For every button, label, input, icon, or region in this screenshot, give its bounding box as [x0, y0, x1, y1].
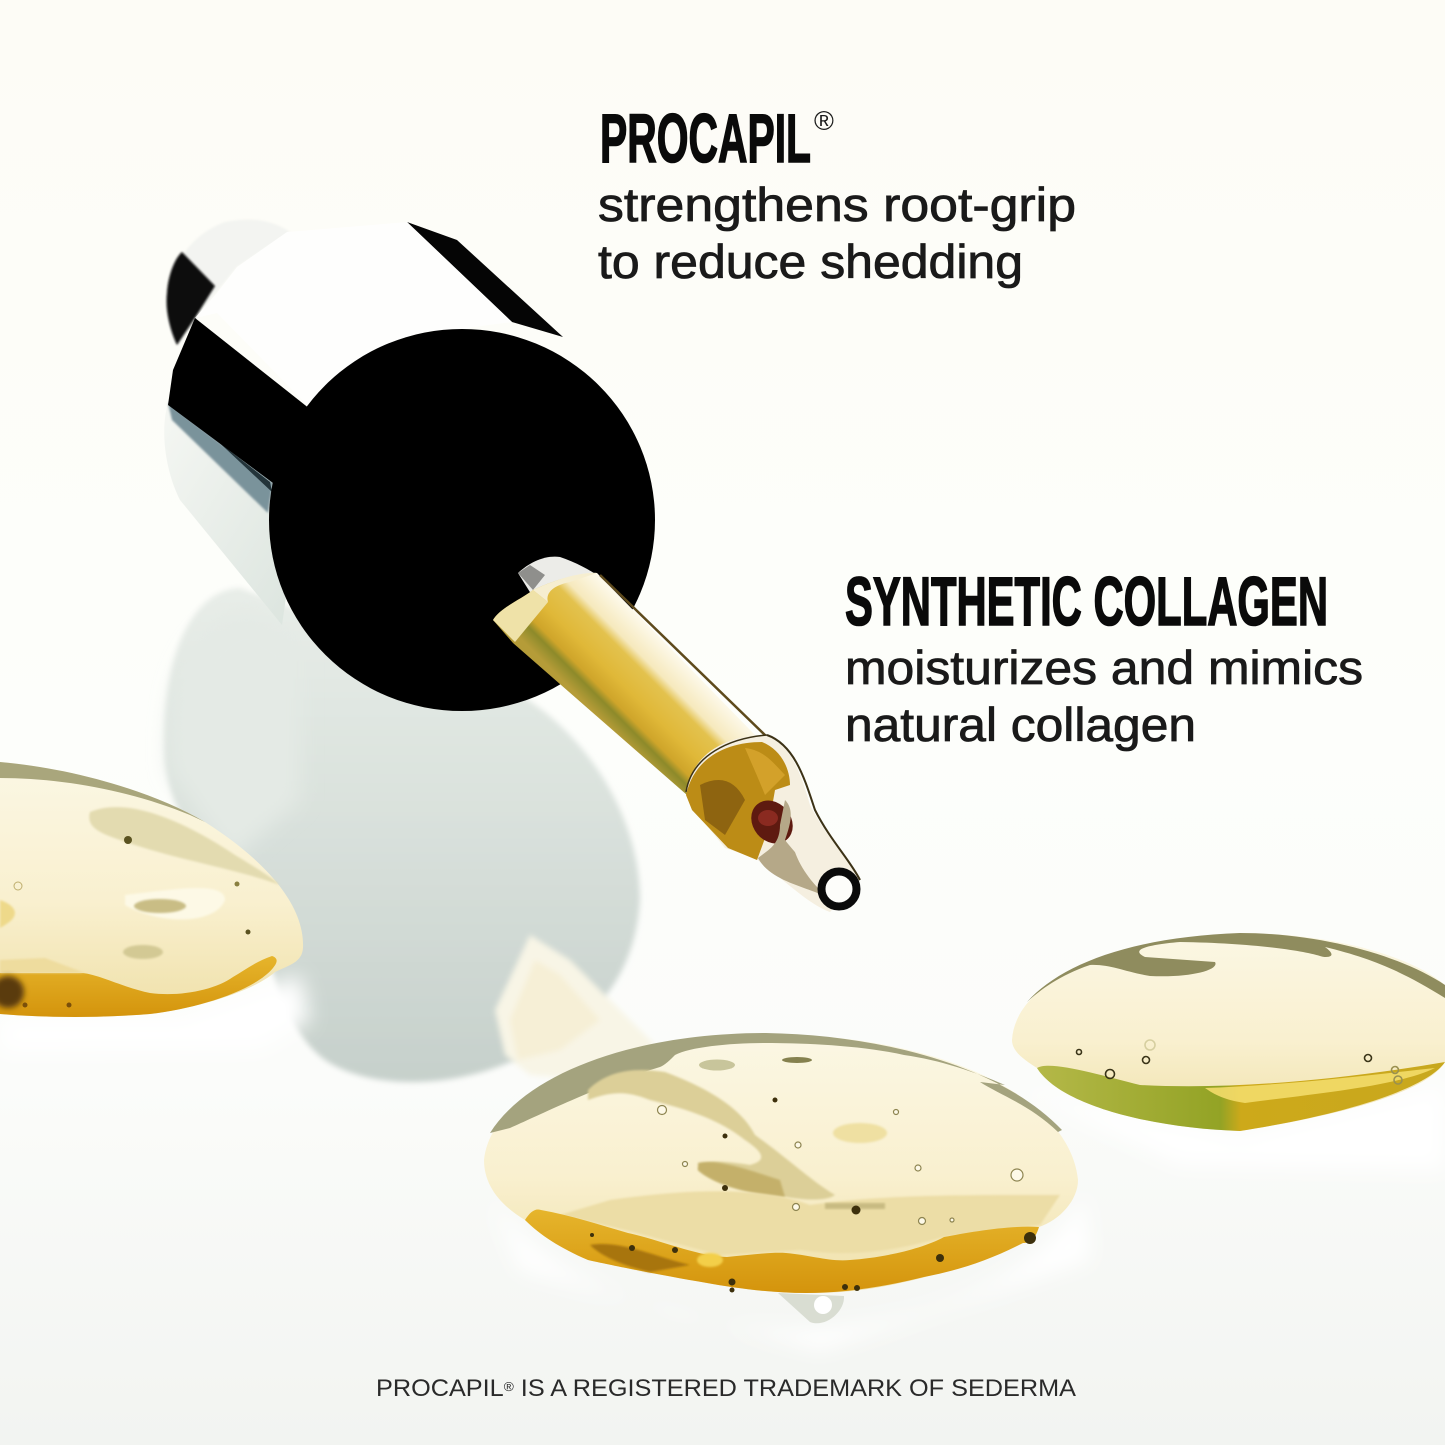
dropper cap: [164, 220, 655, 711]
description: procapil: to reduce shedding: [598, 235, 1023, 288]
dropper shadow on surface: [164, 588, 655, 1082]
drop: left: [0, 762, 310, 1052]
callout: synthetic collagen: [845, 563, 1363, 751]
drop tail: [778, 1293, 844, 1323]
callout: procapil: [598, 100, 1076, 288]
drop: right: [1012, 933, 1445, 1170]
tube bulb: [686, 735, 860, 912]
description: synthetic collagen: moisturizes and mimics: [845, 641, 1363, 694]
trademark footnote: ®: [504, 1379, 514, 1394]
trademark footnote: PROCAPIL: [376, 1375, 497, 1402]
heading: procapil: [600, 100, 834, 177]
heading: procapil: PROCAPIL: [600, 100, 811, 177]
dropper: [164, 220, 860, 912]
description: synthetic collagen: natural collagen: [845, 698, 1196, 751]
drop: center: [484, 1033, 1090, 1350]
description: procapil: [598, 178, 1076, 288]
tube tip: [822, 872, 856, 906]
glass collar: [518, 557, 600, 597]
description: synthetic collagen: [845, 641, 1363, 751]
trademark footnote: IS A REGISTERED TRADEMARK OF SEDERMA: [514, 1375, 1076, 1402]
glass tube with serum: [493, 573, 860, 912]
description: procapil: strengthens root-grip: [598, 178, 1076, 231]
heading: procapil: ®: [814, 106, 834, 136]
